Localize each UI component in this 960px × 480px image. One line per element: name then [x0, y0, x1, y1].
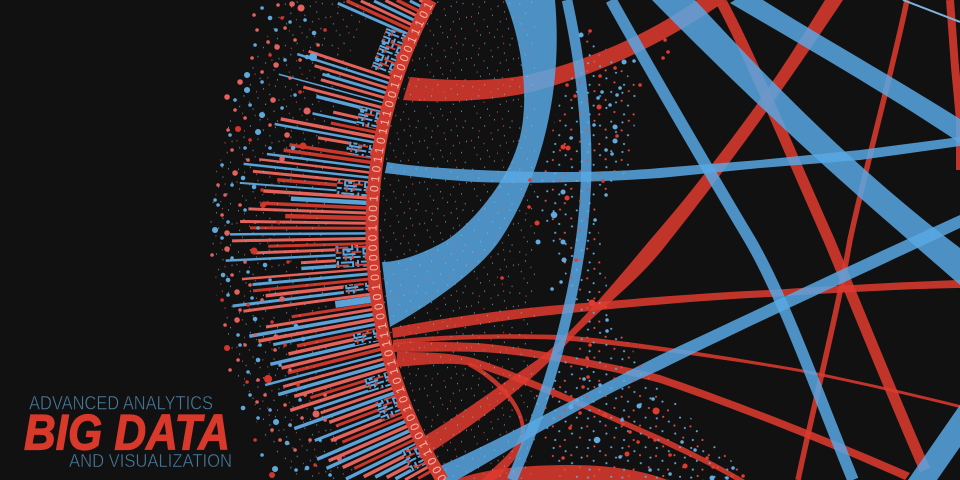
subtitle top: ADVANCED ANALYTICS — [29, 394, 213, 414]
ribbon: blue corner lower right — [908, 405, 960, 480]
ribbon: thin red arc curving down — [468, 362, 525, 480]
radial rays: blue — [226, 1, 425, 479]
particle cluster: red dots — [502, 31, 743, 476]
ribbon: narrow blue curved line — [512, 0, 586, 480]
tiny dust particles left of the ring — [210, 1, 370, 480]
ribbon: narrow red line — [798, 0, 907, 480]
ring band — [372, 0, 442, 480]
particle scatter: red dots — [222, 18, 325, 475]
particle scatter: blue dots — [215, 8, 330, 475]
subtitle bottom: AND VISUALIZATION — [69, 450, 232, 471]
ribbon: long blue band rising from ring — [438, 215, 960, 480]
ribbon: hairline at top right — [903, 0, 960, 22]
ribbon: red strand splitting — [397, 352, 745, 480]
ribbon: wide blue diagonal — [652, 0, 960, 285]
ribbon: red line at right edge — [950, 0, 960, 170]
radial rays: dark red — [250, 0, 430, 478]
ribbon: blue band upper right — [730, 0, 960, 143]
particle cluster: blue dots — [538, 35, 733, 478]
binary ring — [366, 0, 448, 480]
panel: maze data blocks beside the ring — [335, 27, 434, 472]
radial rays: salmon — [232, 0, 428, 480]
tiny particles inside the ring — [380, 0, 540, 480]
ribbons: red chords — [392, 0, 960, 480]
ribbon: red arc at bottom edge — [455, 465, 668, 480]
ribbon: blue line through center — [611, 0, 853, 480]
ribbons: blue chords — [382, 0, 960, 480]
ribbon: red strand to lower right — [393, 342, 910, 480]
fine particle band to the right of the arc — [536, 32, 738, 480]
ribbon: red line crossing right side — [722, 3, 925, 470]
ribbon: blue horizontal band — [385, 137, 960, 183]
binary digits along ring: 0001100010101101110001000001001010110111001100011101 — [368, 3, 446, 480]
main title: BIG DATA — [24, 404, 230, 460]
ribbon: thick red diagonal — [423, 0, 843, 453]
ribbon: thin red strand — [393, 334, 960, 408]
ribbon: red band to right edge — [392, 280, 960, 338]
title block — [24, 394, 232, 471]
particle scatter: salmon dots — [212, 4, 339, 458]
ribbon: red arc to upper right — [403, 0, 727, 101]
ribbon: wide blue arc — [382, 0, 557, 327]
